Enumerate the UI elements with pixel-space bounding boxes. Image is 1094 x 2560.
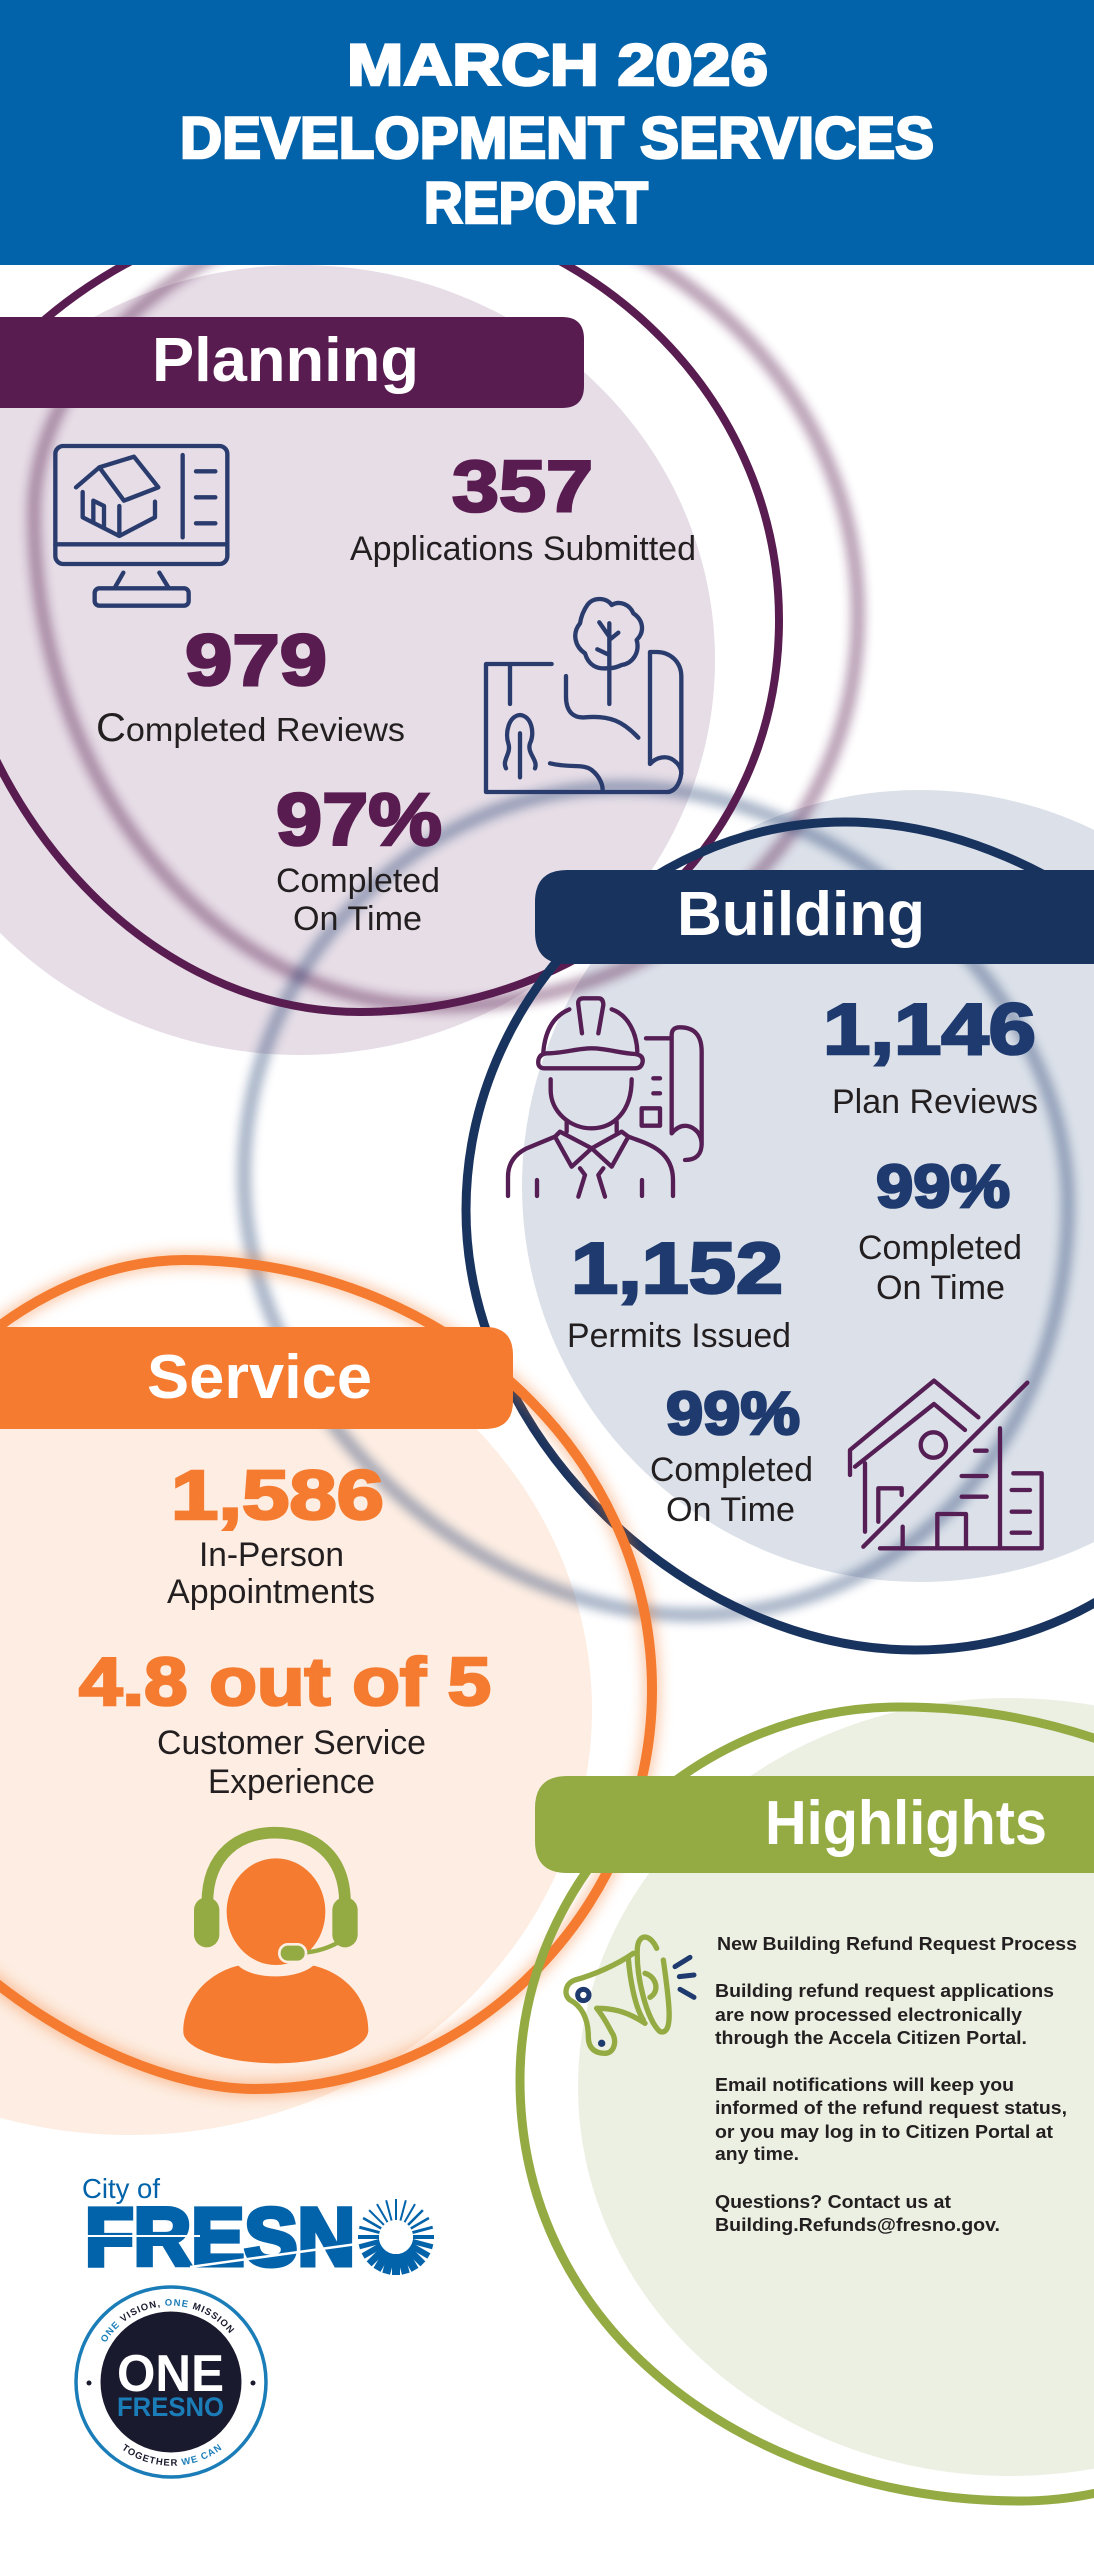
label: applications submitted: Applications Submitted [350,530,696,568]
stat: 99% permits: 99% [666,1380,800,1447]
logo: City of Fresno: FRESN [85,2192,355,2283]
label: in-person: In-Person [199,1536,344,1574]
header banner [0,0,1094,265]
background circle: highlights [578,1698,1094,2476]
stat: 979: 979 [185,621,327,701]
logo: City of Fresno [82,2173,434,2283]
icon: customer service agent with headset [183,1833,368,2063]
label: appointments: Appointments [167,1573,375,1611]
heading bar: planning [0,317,584,408]
label: on time: On Time [293,900,422,938]
icon: construction worker with blueprint [508,998,702,1197]
background circle: service [0,1429,592,2135]
panel: building [508,870,1094,1548]
text: refund paragraph 3: Building.Refunds@fresno.gov. [715,2215,1000,2235]
stat: 1,152: 1,152 [571,1229,783,1309]
stat: 97%: 97% [276,778,442,861]
text: refund paragraph 2: informed of the refund request status, [715,2098,1067,2118]
label: completed: Completed [650,1451,813,1489]
icon: megaphone [566,1937,694,2053]
logo: One Fresno badge: ONE VISION, ONE MISSION [101,2299,234,2342]
stat: 1,146: 1,146 [823,990,1036,1070]
shadow ring: building [244,787,1068,1615]
label: completed reviews: Completed Reviews [96,706,405,750]
logo: One Fresno badge: TOGETHER WE CAN [123,2444,222,2466]
icon: house and building plan [850,1381,1042,1548]
shadow ring: planning [34,199,858,1006]
logo: City of Fresno: City of [82,2173,160,2204]
logo: One Fresno badge: FRESNO [117,2392,224,2422]
label: completed on time: Completed [276,862,440,900]
heading: Building: Building [677,880,925,949]
stat: 357: 357 [452,447,593,527]
ring: highlights [520,1707,1094,2501]
title line 2: DEVELOPMENT SERVICES [180,106,934,171]
label: permits issued: Permits Issued [567,1317,791,1355]
icon: computer with house [55,446,227,606]
heading: Planning: Planning [152,326,419,395]
label: completed: Completed [858,1229,1022,1267]
stat: 4.8 out of 5: 4.8 out of 5 [79,1644,491,1720]
text: refund paragraph 1: are now processed electronically [715,2005,1022,2025]
panel: planning [0,317,696,938]
text: refund paragraph 1: through the Accela Citizen Portal. [715,2028,1027,2048]
title line 3: REPORT [424,171,648,236]
panel: highlights [535,1776,1094,2235]
stat: 1,586: 1,586 [171,1456,384,1534]
text: refund paragraph 1 [715,1981,1054,2048]
text: refund paragraph 2: or you may log in to Citizen Portal at [715,2122,1053,2142]
text: refund paragraph 2: Email notifications will keep you [715,2075,1014,2095]
panel: service [0,1327,513,2063]
icon: landscape plan [486,599,681,792]
logo: One Fresno badge: ONE [117,2345,224,2403]
label: plan reviews: Plan Reviews [832,1083,1038,1121]
heading: Highlights: Highlights [765,1789,1047,1858]
ring glow: service [0,1260,652,2089]
ring: building [466,822,1094,1650]
text: refund paragraph 2: any time. [715,2144,799,2164]
logo: One Fresno badge [74,2285,268,2479]
label: experience: Experience [208,1763,375,1801]
background circle: planning [0,265,715,1055]
text: refund paragraph 2 [715,2075,1067,2164]
text: refund process title: New Building Refund Request Process [717,1934,1077,1954]
heading bar: highlights [535,1776,1094,1873]
label: on time: On Time [876,1269,1005,1307]
heading bar: service [0,1327,513,1429]
label: on time: On Time [666,1491,795,1529]
text: refund paragraph 3: Questions? Contact us at [715,2192,951,2212]
stat: 99% reviews: 99% [876,1153,1010,1220]
heading: Service: Service [147,1343,372,1412]
background circle: building [522,790,1094,1582]
text: refund paragraph 3 [715,2192,1000,2235]
ring: service [0,1260,652,2089]
ring: planning [0,205,779,1012]
text: refund paragraph 1: Building refund request applications [715,1981,1054,2001]
label: customer service: Customer Service [157,1724,426,1762]
title line 1: MARCH 2026 [347,33,768,98]
heading bar: building [535,870,1094,964]
